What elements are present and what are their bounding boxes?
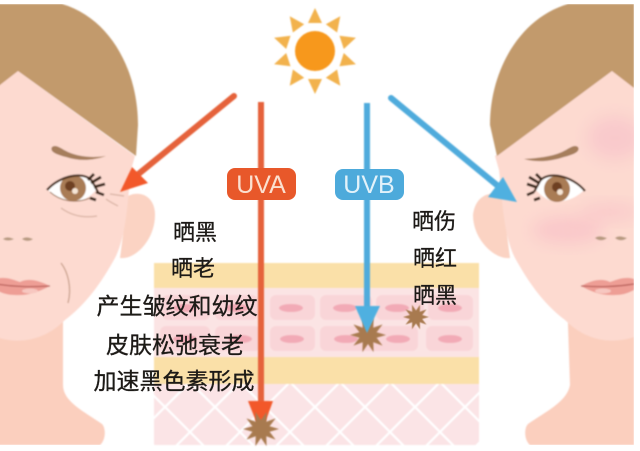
nose [3,237,33,241]
pink cell layer [154,288,479,357]
ear [120,194,155,258]
sunburn patches [536,117,634,244]
star: UVB skin damage small [403,305,429,329]
label: UVA: UVA [236,171,286,199]
text block: UVB effects [412,209,457,308]
ear [473,194,510,258]
hair [490,4,634,156]
text block: UVB effects: 晒黑 [413,283,457,308]
text block: UVA effects: 产生皱纹和幼纹 [96,293,258,319]
text block: UVA effects: 加速黑色素形成 [94,368,254,394]
text block: UVB effects: 晒伤 [412,209,456,234]
skin cross-section diagram [154,263,479,445]
hair [0,4,138,156]
lips [581,278,634,295]
label: UVA [227,168,296,200]
lower yellow skin layer [154,357,479,384]
nose [595,236,627,240]
label: UVB [335,169,404,200]
neck [0,322,106,445]
left face: aged skin [0,4,155,445]
label: UVB: UVB [343,171,395,199]
upper yellow skin layer [154,263,479,288]
text block: UVA effects [94,220,258,394]
face [0,71,135,341]
text block: UVA effects: 皮肤松弛衰老 [106,332,244,358]
arrow: UVB to face [391,98,517,202]
text block: UVA effects: 晒老 [171,256,215,281]
right face: sunburned skin [473,4,640,445]
star: UVA skin damage [243,412,279,446]
face [495,71,634,341]
eyebrow [524,146,579,161]
lips [0,278,50,295]
eyebrow [51,146,106,160]
text block: UVA effects: 晒黑 [173,220,217,245]
arrow: UVA into skin [248,102,273,434]
text block: UVB effects: 晒红 [413,246,457,271]
neck [524,322,634,445]
star: UVB skin damage large [350,318,386,352]
wrinkles [61,194,124,217]
icon: sun [272,8,358,94]
lattice tissue layer [154,384,479,445]
arrow: UVB into skin [355,103,380,333]
smile line [61,263,70,303]
eye [527,174,585,202]
eye [47,174,105,202]
arrow: UVA to face [120,96,234,192]
